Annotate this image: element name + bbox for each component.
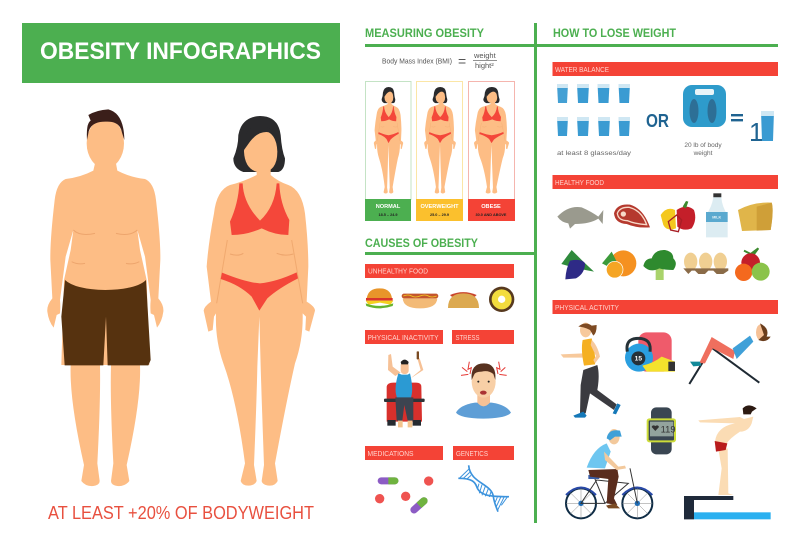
icon: sit-up on bench bbox=[689, 323, 771, 384]
icon: runner bbox=[561, 323, 621, 418]
icon: steak bbox=[614, 205, 650, 228]
panel: overweight BMI bbox=[416, 82, 463, 221]
panel: obese BMI bbox=[468, 82, 515, 221]
icon: weights, scale and sneakers bbox=[625, 332, 675, 372]
icon: fitness watch bbox=[647, 407, 676, 454]
panel: healthy food: HEALTHY FOOD bbox=[555, 180, 604, 187]
icon: weights, scale and sneakers: 15 bbox=[635, 356, 642, 363]
icon: milk bottle: MILK bbox=[712, 216, 721, 220]
panel: overweight BMI: OVERWEIGHT bbox=[420, 204, 459, 210]
icon: broccoli bbox=[643, 250, 676, 280]
BMI formula: hight² bbox=[475, 61, 494, 70]
panel: physical inactivity: PHYSICAL INACTIVITY bbox=[368, 335, 439, 342]
icon: eggs in tray bbox=[683, 253, 728, 274]
panel: stress bbox=[452, 330, 514, 419]
panel: physical activity bbox=[552, 300, 778, 519]
icon: DNA helix bbox=[458, 465, 509, 512]
panel: physical inactivity bbox=[365, 330, 443, 427]
illustration: overweight man bbox=[47, 109, 163, 486]
title banner: OBESITY INFOGRAPHICS bbox=[40, 38, 321, 65]
caption: glasses per day: at least 8 glasses/day bbox=[557, 150, 632, 157]
caption: at least +20% of bodyweight: AT LEAST +20% OF BODYWEIGHT bbox=[48, 503, 314, 523]
icon: stressed man bbox=[456, 362, 511, 419]
icon: pills bbox=[375, 476, 433, 515]
icon: diver on platform bbox=[684, 405, 771, 519]
panel: physical activity: PHYSICAL ACTIVITY bbox=[555, 305, 619, 312]
icon: bathroom scale bbox=[683, 85, 726, 127]
BMI formula: = bbox=[458, 53, 466, 69]
panel: unhealthy food bbox=[365, 264, 514, 312]
icon: milk bottle bbox=[706, 193, 728, 237]
heading: causes of obesity: CAUSES OF OBESITY bbox=[365, 236, 478, 250]
BMI formula: Body Mass Index (BMI) bbox=[382, 56, 452, 66]
icon: burger bbox=[366, 288, 393, 308]
panel: medications: MEDICATIONS bbox=[368, 451, 414, 458]
panel: obese BMI: 30.0 AND ABOVE bbox=[476, 213, 507, 217]
panel: obese BMI: OBESE bbox=[481, 204, 501, 210]
panel: water balance: WATER BALANCE bbox=[555, 67, 609, 74]
panel: water balance bbox=[552, 62, 778, 157]
icon: taco bbox=[448, 292, 479, 308]
panel: unhealthy food: UNHEALTHY FOOD bbox=[368, 268, 428, 276]
BMI formula: weight bbox=[473, 51, 497, 60]
icon: apples and orange bbox=[735, 248, 770, 281]
panel: medications bbox=[365, 446, 443, 515]
equation: equals one glass bbox=[731, 111, 774, 147]
icon: fish bbox=[557, 207, 603, 229]
caption: body weight bbox=[684, 142, 722, 157]
caption: body weight: weight bbox=[693, 150, 713, 157]
icon: hot dog bbox=[402, 294, 438, 308]
icon: bell peppers bbox=[661, 201, 695, 232]
panel: overweight BMI: 25.0 – 29.9 bbox=[430, 213, 449, 217]
BMI formula bbox=[382, 51, 497, 70]
illustration: overweight woman bbox=[204, 116, 315, 486]
icon: donut bbox=[489, 287, 514, 312]
heading: how to lose weight: HOW TO LOSE WEIGHT bbox=[553, 26, 677, 40]
icon: oranges bbox=[602, 250, 636, 278]
icons: eight glasses of water bbox=[557, 84, 630, 136]
panel: stress: STRESS bbox=[456, 335, 480, 342]
section dividers bbox=[365, 23, 778, 523]
icon: man on armchair bbox=[384, 351, 425, 427]
panel: genetics: GENETICS bbox=[456, 451, 488, 458]
panel: normal BMI: NORMAL bbox=[376, 204, 401, 210]
caption: body weight: 20 lb of body bbox=[684, 142, 722, 149]
panel: genetics bbox=[453, 446, 514, 512]
label: OR: OR bbox=[646, 111, 669, 131]
icon: cyclist bbox=[566, 429, 652, 518]
icon: fitness watch: 119 bbox=[661, 425, 676, 435]
panel: normal BMI bbox=[365, 82, 411, 221]
panel: healthy food bbox=[552, 175, 778, 281]
equation: equals one glass: 1 bbox=[749, 117, 763, 147]
heading: measuring obesity: MEASURING OBESITY bbox=[365, 26, 484, 40]
icon: grapes bbox=[561, 250, 594, 279]
title banner bbox=[22, 23, 340, 83]
panel: normal BMI: 18.5 – 24.9 bbox=[378, 213, 398, 217]
icon: bread loaf bbox=[738, 203, 773, 231]
